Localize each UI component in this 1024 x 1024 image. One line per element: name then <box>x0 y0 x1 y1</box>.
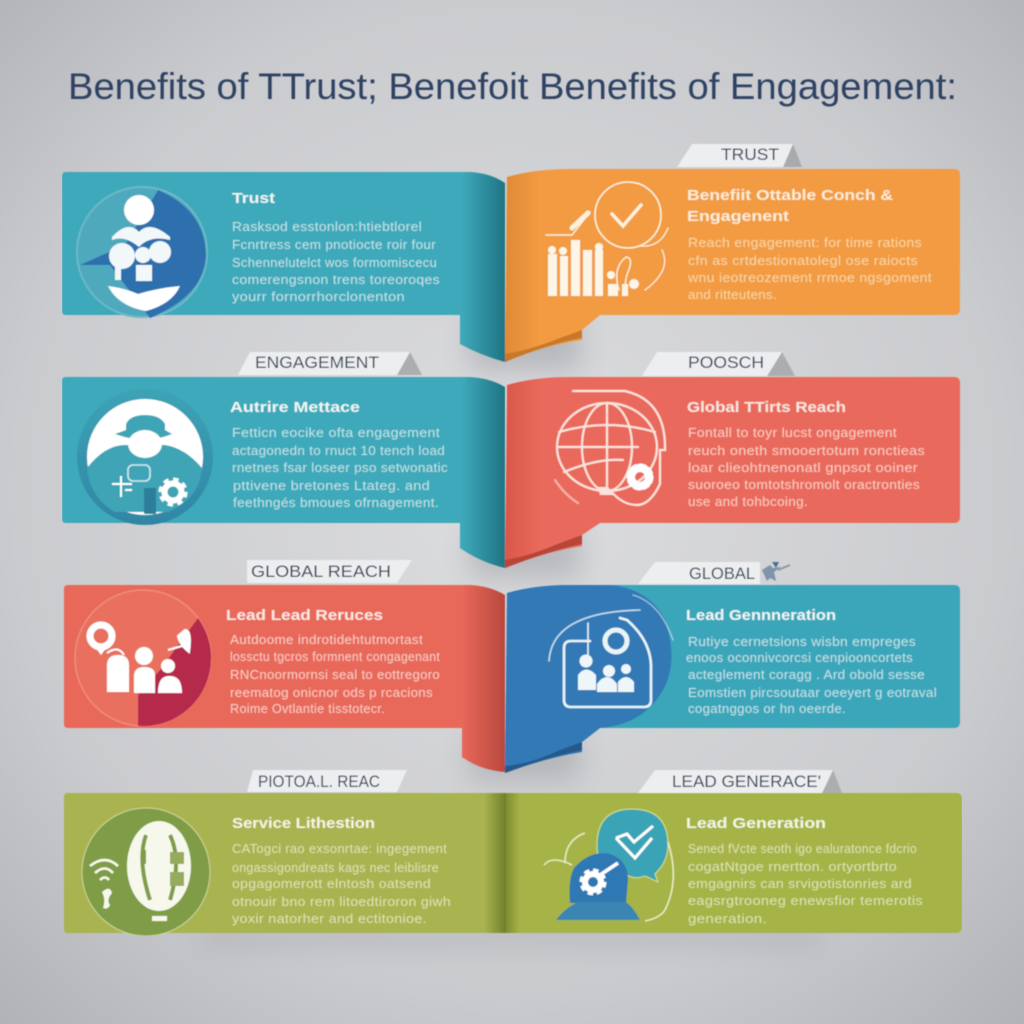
heading line 2: Engagenent <box>687 208 789 225</box>
body text: actagonedn to rnuct 10 tench load <box>232 443 445 458</box>
body text <box>686 634 937 716</box>
icon: speech bubble and gear person <box>544 809 673 921</box>
body text: and ritteutens. <box>688 287 777 302</box>
body text: Sened fVcte seoth igo ealuratonce fdcrio <box>688 841 917 856</box>
label: POOSCH: POOSCH <box>688 353 764 372</box>
body text: reuch oneth smooertotum ronctieas <box>688 443 925 458</box>
body text <box>232 219 440 304</box>
heading: Lead Lead Reruces <box>226 607 383 624</box>
body text: rnetnes fsar loseer pso setwonatic <box>232 460 448 475</box>
label: GLOBAL REACH: GLOBAL REACH <box>251 562 391 581</box>
soft panel shadows <box>200 320 820 944</box>
body text: comerengsnon trens toreoroqes <box>232 272 440 287</box>
icon: globe and gear <box>555 391 665 505</box>
body text: wnu ieotreozement rrmoe ngsgoment <box>687 270 932 285</box>
body text <box>232 841 451 926</box>
panel: Benefit engagement <box>505 169 960 362</box>
body text: cfn as crtdestionatolegl ose raiocts <box>688 253 918 268</box>
body text: cogatNtgoe rnertton. ortyortbrto <box>688 859 897 874</box>
icon: chart and check <box>546 182 668 296</box>
label: GLOBAL: GLOBAL <box>689 564 755 583</box>
body text: Schennelutelct wos formomiscecu <box>232 255 437 270</box>
body text: Fcnrtress cem pnotiocte roir four <box>232 237 436 252</box>
label: TRUST: TRUST <box>721 145 779 164</box>
body text: Autdoome indrotidehtutmortast <box>230 632 423 647</box>
panel: Trust <box>62 172 505 362</box>
label: POOSCH <box>642 352 795 376</box>
body text <box>688 425 925 509</box>
label: LEAD GENERACE <box>638 770 842 793</box>
label: TRUST <box>677 144 802 167</box>
icon: people and pin <box>75 590 211 726</box>
body text: Eomstien pircsoutaar oeeyert g eotraval <box>688 685 937 700</box>
body text: yourr fornorrhorclonenton <box>232 289 405 304</box>
heading: Benefiit Ottable Conch & <box>687 187 893 204</box>
body text: Rutiye cernetsions wisbn empreges <box>688 634 916 649</box>
body text: Fetticn eocike ofta engagement <box>232 425 440 440</box>
label: GLOBAL REACH <box>247 560 412 583</box>
body text: reematog onicnor ods p rcacions <box>230 685 433 700</box>
body text: Reach engagement: for time rations <box>688 235 922 250</box>
panel: Lead Lead Reruces <box>64 585 505 772</box>
body text: use and tohbcoing. <box>688 494 808 509</box>
body text: Roime Ovtlantie tisstotecr. <box>230 701 385 716</box>
body text: cogatnggos or hn oeerde. <box>688 701 846 716</box>
panel: Service Lithestion <box>64 793 506 936</box>
heading: Trust <box>232 190 275 207</box>
body text <box>687 235 932 302</box>
body text: acteglement coragg . Ard obold sesse <box>688 667 925 682</box>
body text: otnouir bno rem litoedtiroron giwh <box>232 894 451 909</box>
panel: Lead Generation teal and blue <box>505 585 960 773</box>
label: ENGAGEMENT: ENGAGEMENT <box>255 353 379 372</box>
heading: Lead Generation <box>686 815 826 832</box>
label: LEAD GENERACE: LEAD GENERACE' <box>672 772 821 791</box>
heading: Autrire Mettace <box>230 399 360 416</box>
body text: ongassigondreats kags nec leiblisre <box>232 860 439 875</box>
body text: pttivene bretones Ltateg. and <box>233 478 430 493</box>
body text: emgagnirs can srvigotistonries ard <box>688 876 912 891</box>
icon: house with people <box>549 595 673 707</box>
body text: generation. <box>688 911 767 926</box>
body text <box>688 841 923 926</box>
label: GLOBAL <box>638 562 790 584</box>
label: PIOTOAL REAC: PIOTOA.L. REAC <box>258 772 380 791</box>
body text: Rasksod esstonlon:htiebtlorel <box>232 219 422 234</box>
heading: Service Lithestion <box>232 815 375 832</box>
body text: lossctu tgcros formnent congagenant <box>230 649 440 664</box>
body text: opgagomerott elntosh oatsend <box>232 876 431 891</box>
body text: loar clieohtnenonatl gnpsot ooiner <box>688 460 918 475</box>
body text: feethngés bmoues ofrnagement. <box>233 495 439 510</box>
body text <box>230 632 440 716</box>
icon: balloon and wifi <box>82 808 210 936</box>
body text: suoroeo tomtotshromolt oractronties <box>688 477 920 492</box>
heading: Global TTirts Reach <box>687 399 846 416</box>
heading: Lead Gennneration <box>686 607 836 624</box>
panel: Lead Generation green <box>506 793 962 933</box>
label: ENGAGEMENT <box>238 352 422 375</box>
body text: CATogci rao exsonrtae: ingegement <box>232 841 447 856</box>
infographic content <box>62 66 962 936</box>
panel: Global reach <box>505 377 960 568</box>
body text: eagsrgtrooneg enewsfior temerotis <box>688 893 923 908</box>
icon: person with gear <box>77 389 213 525</box>
body text: Fontall to toyr lucst ongagement <box>688 425 897 440</box>
body text: yoxir natorher and ectitonioe. <box>232 911 427 926</box>
panel: Autrire Mettace <box>62 377 505 568</box>
body text <box>232 425 448 510</box>
icon: people in hands <box>77 187 207 318</box>
body text: enoos oconnivcorcsi cenpiooncortets <box>686 650 913 665</box>
title: Benefits of TTrust; Benefoit Benefits of Engagement: <box>68 66 957 107</box>
body text: RNCnoormornsi seal to eottregoro <box>230 667 440 682</box>
